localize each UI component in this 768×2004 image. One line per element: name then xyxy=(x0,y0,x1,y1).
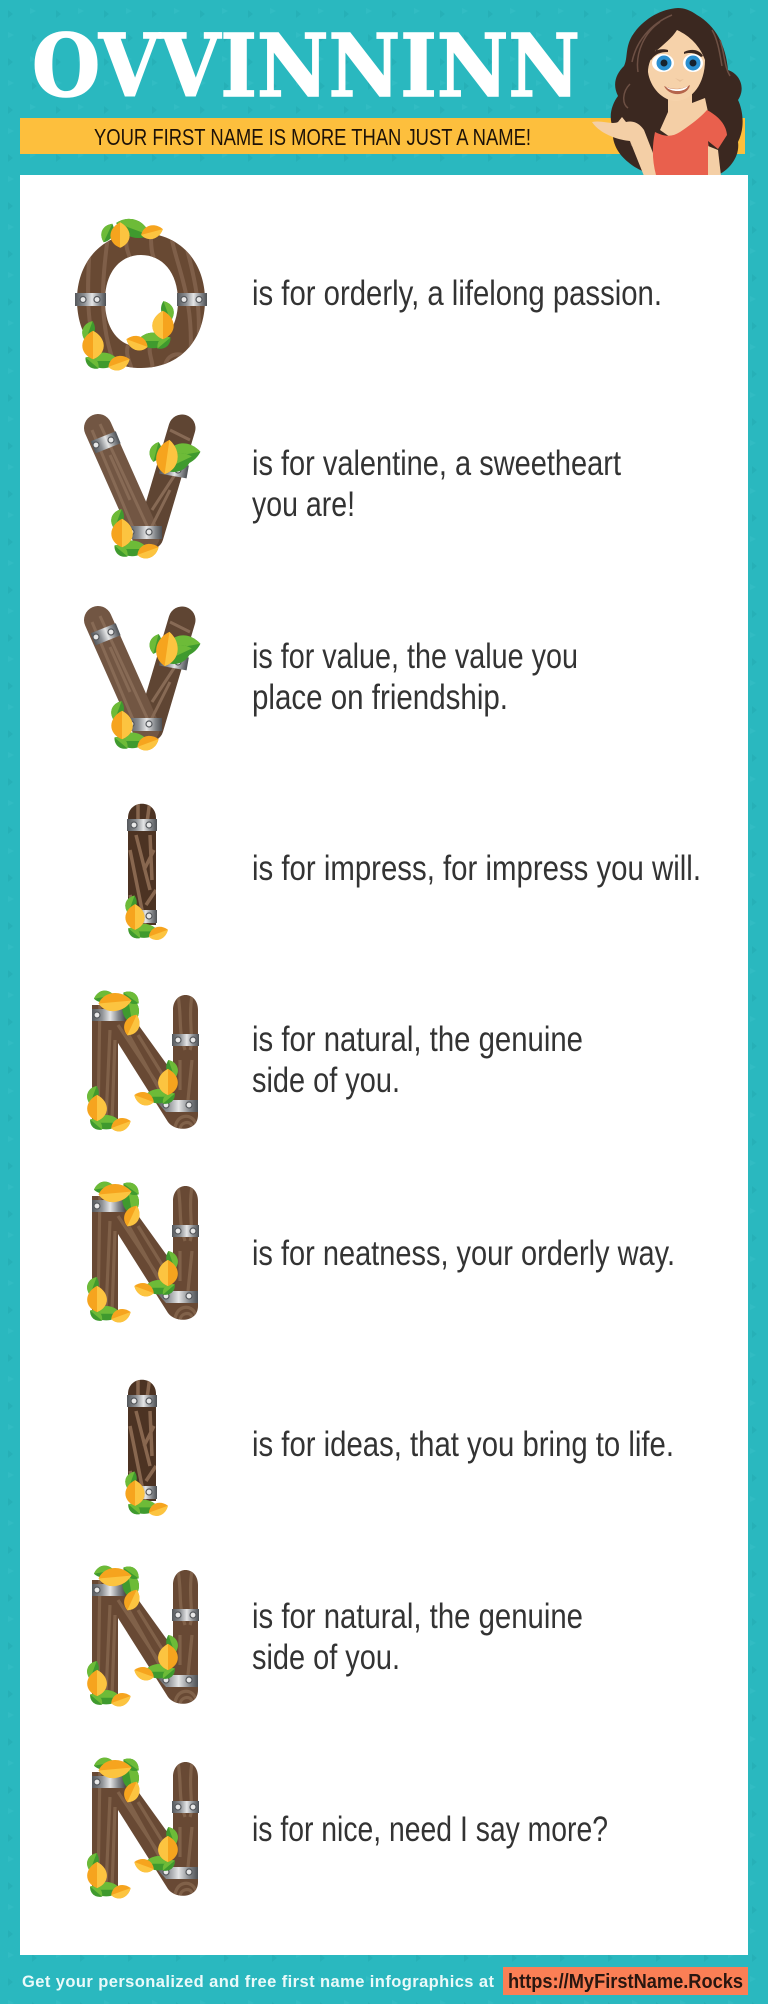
row: N nice xyxy=(84,1755,608,1901)
icon: wooden letter V xyxy=(91,616,202,753)
text: N natural meaning: is for natural, the genuine xyxy=(252,1020,583,1059)
text: V value meaning: is for value, the value you xyxy=(252,637,578,676)
text: N neatness meaning: is for neatness, your orderly way. xyxy=(252,1234,675,1273)
text: N natural meaning xyxy=(252,1597,583,1677)
subtitle banner xyxy=(20,118,745,154)
row: I ideas xyxy=(123,1376,674,1519)
subtitle banner: YOUR FIRST NAME IS MORE THAN JUST A NAME! xyxy=(94,124,531,150)
row: V value xyxy=(91,616,578,753)
icon: wooden letter N xyxy=(84,988,199,1134)
row: O xyxy=(75,214,662,373)
text: N natural meaning: side of you. xyxy=(252,1061,400,1100)
row: N natural second xyxy=(84,1563,583,1709)
row: I impress xyxy=(123,800,701,943)
icon: wooden letter I xyxy=(123,1376,170,1519)
icon: wooden letter N xyxy=(84,1755,199,1901)
icon: wooden letter O xyxy=(75,214,207,373)
row: N natural xyxy=(84,988,583,1134)
text: O meaning: is for orderly, a lifelong passion. xyxy=(252,274,662,313)
icon: wooden letter V xyxy=(91,424,202,561)
footer url badge: https://MyFirstName.Rocks xyxy=(508,1971,743,1993)
text: V value meaning: place on friendship. xyxy=(252,678,508,717)
icon: wooden letter I xyxy=(123,800,170,943)
row: V valentine xyxy=(91,424,621,561)
text: N natural meaning: is for natural, the genuine xyxy=(252,1597,583,1636)
text: N nice meaning: is for nice, need I say more? xyxy=(252,1810,608,1849)
illustration: smiling woman xyxy=(592,8,743,176)
text: V valentine meaning: is for valentine, a sweetheart xyxy=(252,444,621,483)
text: V valentine meaning xyxy=(252,444,621,524)
icon: wooden letter N xyxy=(84,1179,199,1325)
text: N natural meaning: side of you. xyxy=(252,1638,400,1677)
footer xyxy=(22,1967,748,1995)
text: N natural meaning xyxy=(252,1020,583,1100)
footer text: Get your personalized and free first name infographics at xyxy=(22,1973,494,1991)
row: N neatness xyxy=(84,1179,675,1325)
text: V valentine meaning: you are! xyxy=(252,485,355,524)
text: V value meaning xyxy=(252,637,578,717)
title: OVVINNINN xyxy=(32,16,580,117)
text: I ideas meaning: is for ideas, that you bring to life. xyxy=(252,1425,674,1464)
icon: wooden letter N xyxy=(84,1563,199,1709)
